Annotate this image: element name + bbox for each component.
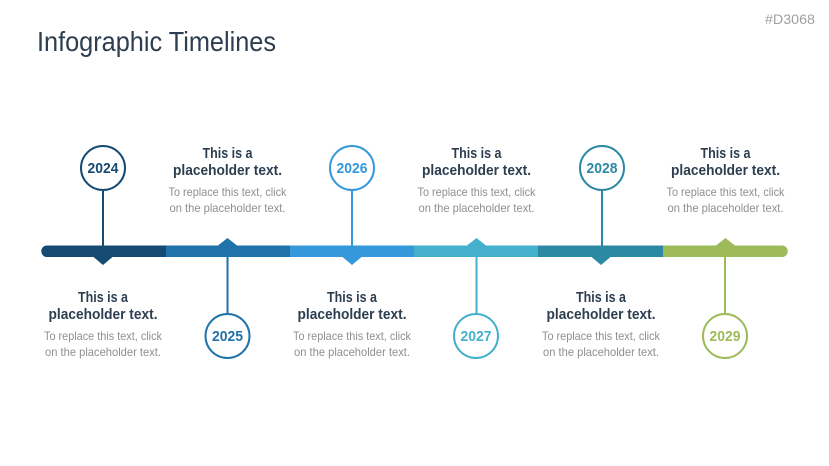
text block 2029: This is a (700, 145, 751, 162)
text block 2025 (168, 145, 287, 215)
page code: #D3068 (765, 12, 815, 27)
year badge 2028: 2028 (586, 160, 618, 177)
milestone 2025 (206, 238, 250, 358)
year badge 2026: 2026 (336, 160, 368, 177)
text block 2026: This is a (327, 289, 378, 306)
text block 2027 (418, 145, 536, 215)
text block 2024: To replace this text, click (44, 329, 163, 343)
milestone 2029 (703, 238, 747, 358)
milestone 2024 (81, 146, 125, 265)
text block 2024 (44, 289, 163, 359)
marker and stem 2027 (467, 238, 486, 314)
text block 2024: This is a (78, 289, 129, 306)
text block 2029 (666, 145, 785, 215)
text block 2027: This is a (452, 145, 502, 162)
text block 2027: To replace this text, click (418, 185, 536, 199)
timeline bar (41, 246, 788, 257)
title: Infographic Timelines (37, 26, 276, 57)
year badge 2025: 2025 (212, 328, 243, 345)
marker and stem 2024 (94, 190, 112, 265)
text block 2029: on the placeholder text. (668, 201, 784, 215)
text block 2024: on the placeholder text. (45, 345, 161, 359)
marker and stem 2025 (218, 238, 237, 314)
text block 2029: placeholder text. (671, 162, 780, 179)
milestone 2028 (580, 146, 624, 265)
text block 2026 (293, 289, 412, 359)
milestone 2026 (330, 146, 374, 265)
text block 2025: To replace this text, click (168, 185, 287, 199)
text block 2027: on the placeholder text. (418, 201, 534, 215)
text block 2026: placeholder text. (298, 306, 406, 323)
text block 2028: on the placeholder text. (543, 345, 659, 359)
marker and stem 2026 (342, 190, 362, 265)
text block 2029: To replace this text, click (666, 185, 785, 199)
text block 2028: To replace this text, click (542, 329, 661, 343)
text block 2024: placeholder text. (48, 306, 158, 323)
year badge 2024: 2024 (88, 160, 119, 177)
text block 2028 (542, 289, 661, 359)
text block 2026: on the placeholder text. (294, 345, 410, 359)
text block 2025: This is a (202, 145, 253, 162)
marker and stem 2028 (592, 190, 610, 265)
text block 2028: placeholder text. (546, 306, 656, 323)
text block 2025: placeholder text. (173, 162, 282, 179)
milestone 2027 (454, 238, 498, 358)
year badge 2029: 2029 (710, 328, 740, 345)
marker and stem 2029 (716, 238, 735, 314)
text block 2028: This is a (576, 289, 627, 306)
year badge 2027: 2027 (460, 328, 492, 345)
text block 2027: placeholder text. (422, 162, 531, 179)
text block 2026: To replace this text, click (293, 329, 412, 343)
text block 2025: on the placeholder text. (170, 201, 286, 215)
